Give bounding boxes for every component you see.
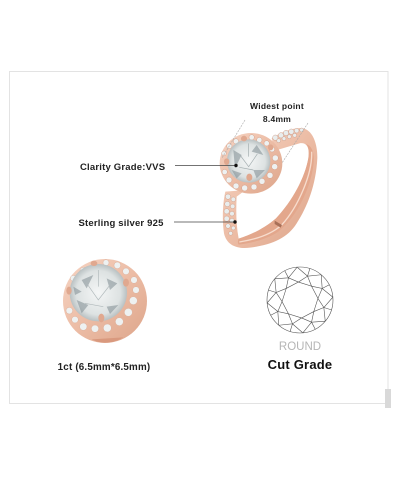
center stone [70,264,127,321]
ring photo [220,128,317,248]
halo stones [222,135,278,191]
panel frame [10,72,388,404]
halo setting [220,133,282,194]
top view of ring head [63,259,147,343]
scroll marker [385,389,391,408]
label: widest point [250,101,304,124]
ring band [223,128,317,248]
shank stones lower [224,194,236,235]
callout: clarity grade [80,162,238,173]
label: cut grade: Cut Grade [268,357,332,372]
shank stones upper [273,128,304,143]
center stone [227,139,270,183]
callout: sterling silver [78,218,237,229]
icon: round cut diagram [261,261,339,339]
prongs [224,136,273,181]
callout: sterling silver: Sterling silver 925 [78,218,164,229]
label: widest point: Widest point [250,101,304,111]
inner band surface [238,144,314,245]
label: widest point: 8.4mm [263,114,291,124]
prongs [66,261,129,322]
halo stones [66,260,139,332]
label: round: ROUND [279,341,321,353]
callout: clarity grade: Clarity Grade:VVS [80,162,165,173]
dashed width guide lines [222,120,308,163]
label: carat size: 1ct (6.5mm*6.5mm) [58,362,150,373]
